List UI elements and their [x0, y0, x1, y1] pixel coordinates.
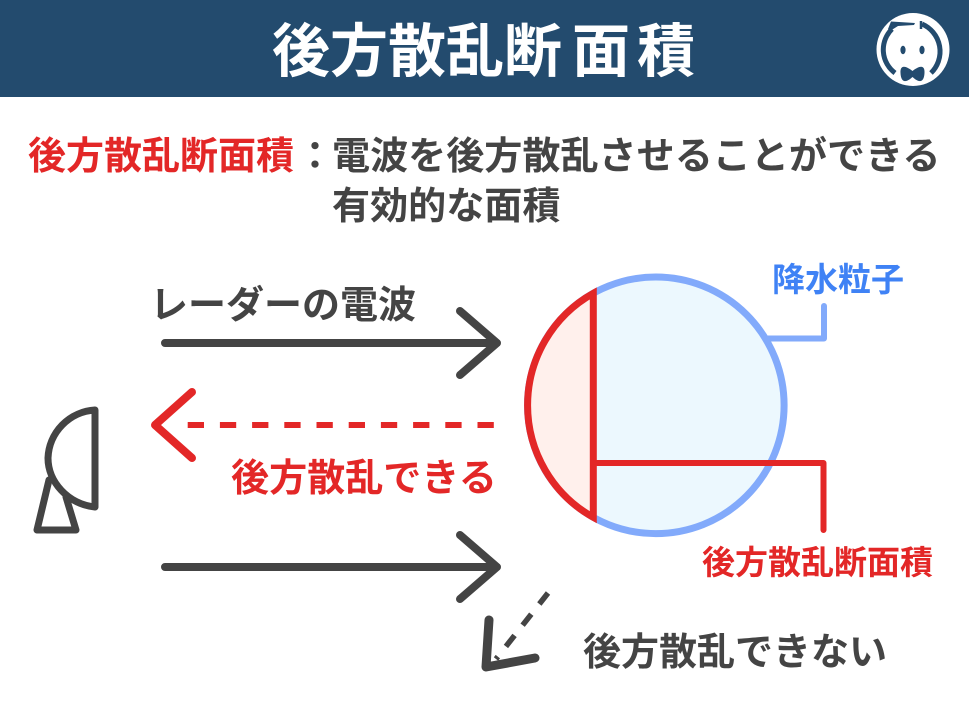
arrow: backscatter [155, 392, 495, 458]
title: 積 [637, 20, 695, 84]
arrow: no backscatter [486, 593, 548, 667]
icon: logo mascot [876, 13, 950, 86]
title: 面 [572, 20, 630, 84]
definition text: 電波を後方散乱させることができる [332, 135, 940, 178]
header band [0, 0, 969, 97]
definition colon: ： [296, 136, 334, 178]
label: cross-section: 後方散乱断面積 [702, 544, 933, 581]
label: no backscatter: 後方散乱できない [583, 632, 887, 674]
label: backscatter: 後方散乱できる [231, 457, 497, 500]
arrow: incoming wave bottom [165, 535, 497, 599]
title [272, 20, 695, 84]
definition text [332, 135, 940, 228]
particle leader line [768, 306, 824, 338]
label: precipitation particle: 降水粒子 [772, 261, 904, 298]
title: 後方散乱断 [272, 20, 562, 84]
cross-section segment [528, 293, 593, 517]
arrow: incoming wave top [165, 311, 497, 375]
cross-section leader line [593, 463, 824, 530]
diagram: particle [528, 277, 784, 534]
label: radar wave: レーダーの電波 [150, 285, 416, 327]
icon: radar [37, 410, 95, 530]
definition text: 有効的な面積 [332, 185, 560, 228]
definition term: 後方散乱断面積 [28, 136, 294, 178]
